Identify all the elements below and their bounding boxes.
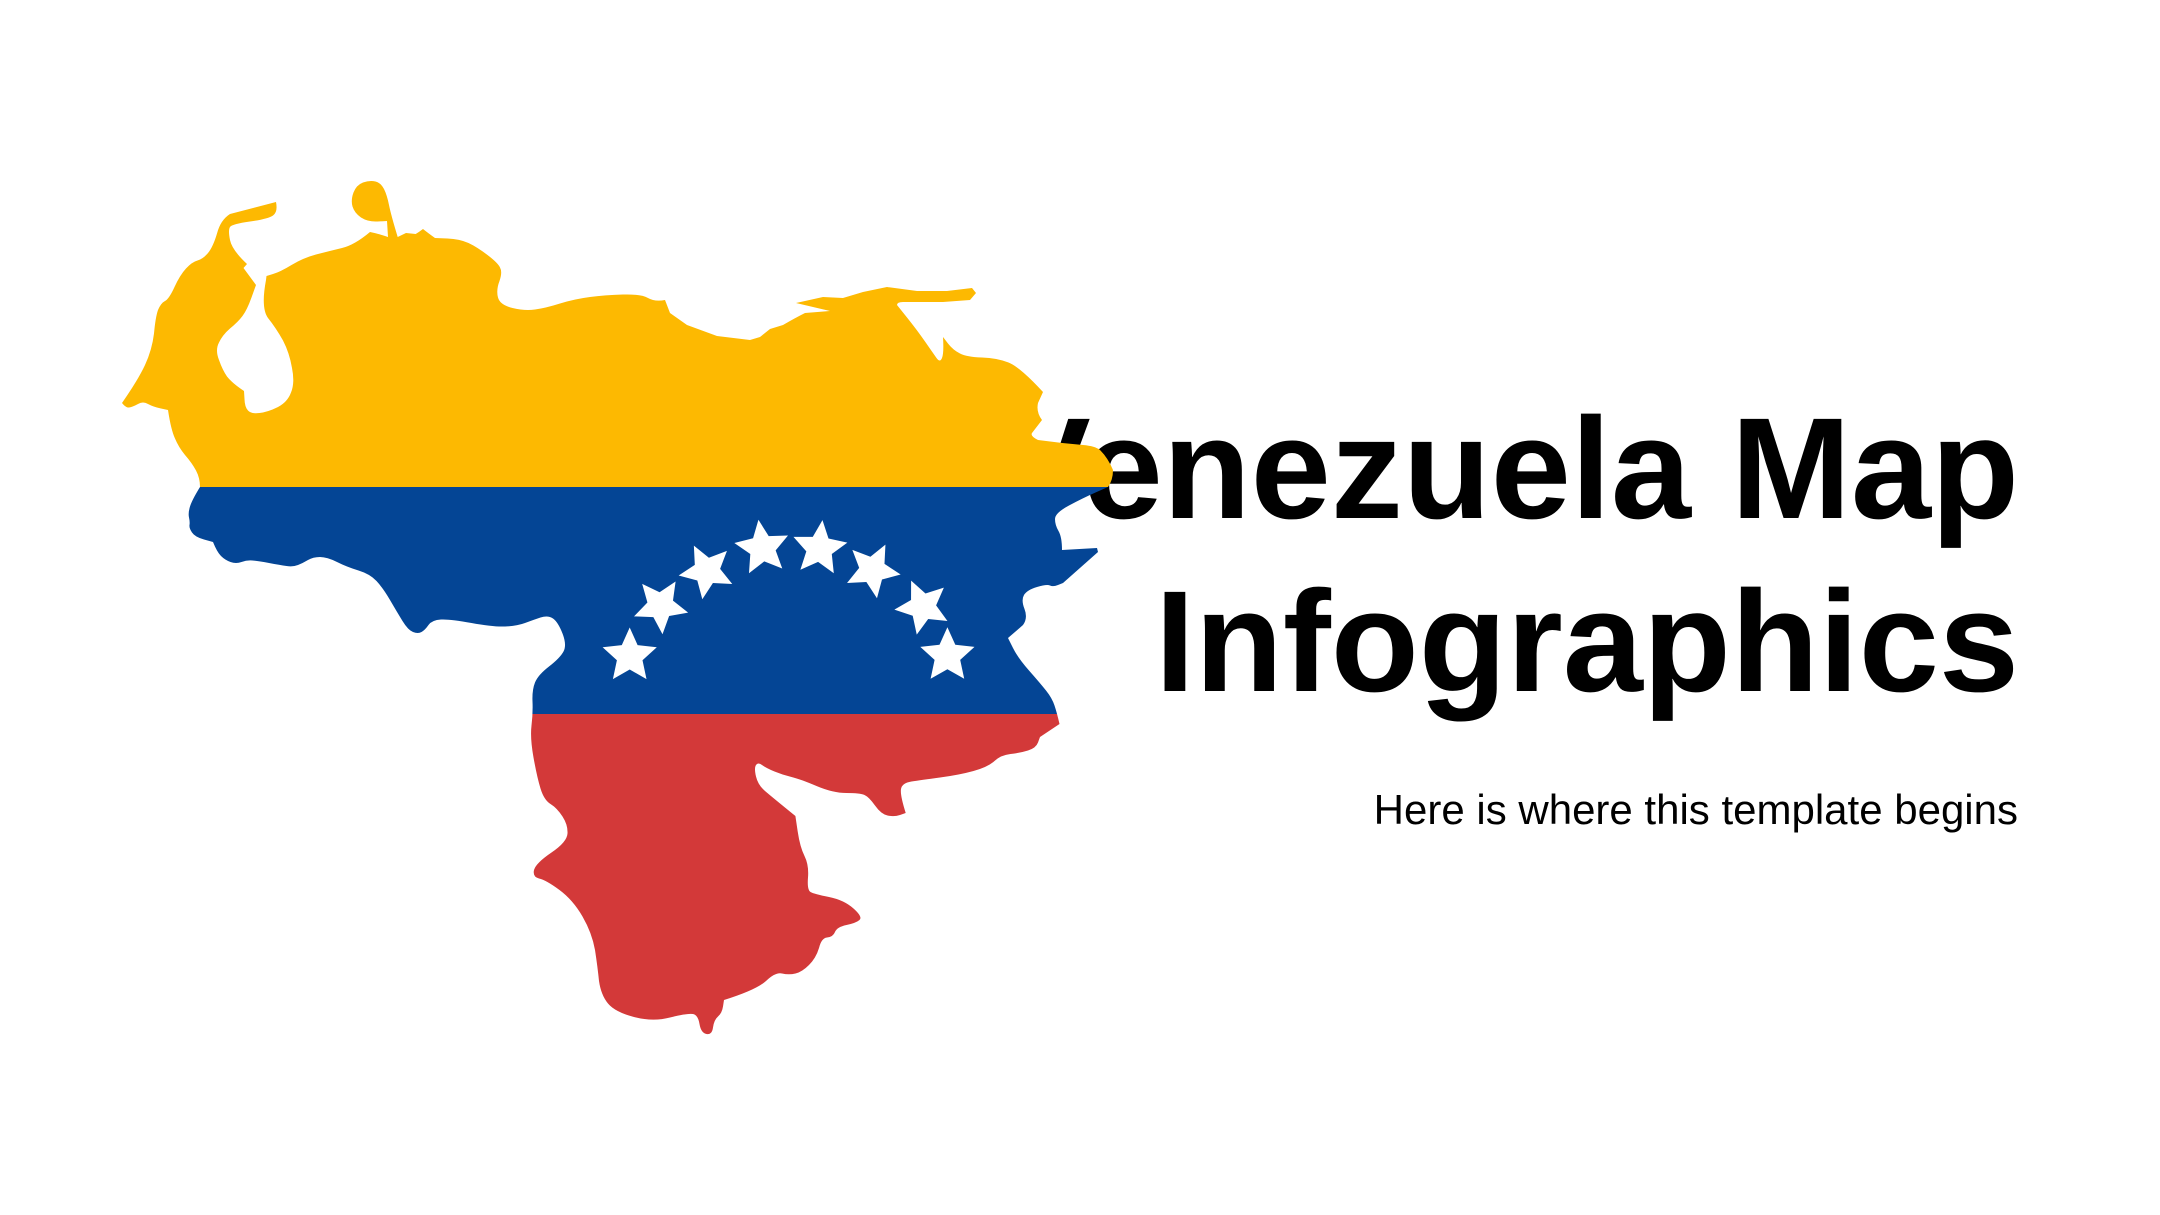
star 1 (603, 628, 657, 679)
star 7 (886, 570, 957, 639)
star 4 (732, 516, 792, 575)
blue stripe (188, 487, 1108, 714)
subtitle text: Here is where this template begins (1374, 786, 2018, 833)
title: Venezuela Map (995, 388, 2019, 549)
flag stripes clipped to country outline (100, 160, 1140, 1054)
star 8 (920, 627, 974, 679)
red stripe (531, 714, 1060, 1034)
map of Venezuela in flag colours (100, 160, 1140, 1054)
eight white stars arc (603, 516, 975, 679)
title: Infographics (1155, 561, 2019, 722)
title (995, 388, 2019, 722)
star 6 (838, 532, 910, 603)
star 5 (790, 517, 849, 574)
star 3 (670, 533, 741, 604)
star 2 (625, 567, 699, 640)
yellow stripe (122, 181, 1113, 487)
